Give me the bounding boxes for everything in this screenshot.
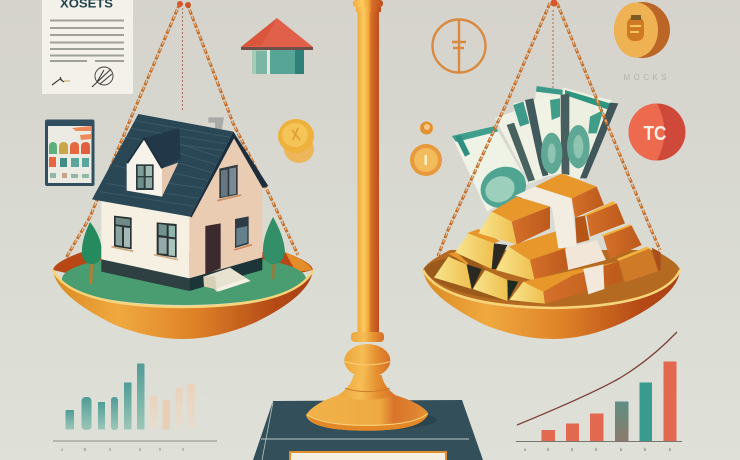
axis labels right: b xyxy=(595,447,598,452)
left scale pan xyxy=(53,252,313,305)
axis labels left: 5 xyxy=(109,447,112,452)
gold bar: bottom center xyxy=(473,270,518,301)
left chains xyxy=(66,1,298,258)
gold bar: rear top xyxy=(535,173,604,218)
bill left-middle xyxy=(495,102,543,183)
bill far right xyxy=(561,87,618,178)
roof xyxy=(92,114,233,217)
tree left xyxy=(82,222,102,284)
icon: top right gold coin xyxy=(614,2,670,58)
icon: red coin xyxy=(628,104,686,160)
upper collar xyxy=(351,332,384,342)
pole cap xyxy=(353,0,383,12)
axis right xyxy=(516,440,682,442)
bill middle xyxy=(513,95,562,178)
pedestal xyxy=(253,400,483,460)
bulb xyxy=(344,344,390,377)
bill front xyxy=(452,126,533,215)
right chains xyxy=(438,0,660,256)
document signature xyxy=(52,67,113,87)
gold bar: top front xyxy=(478,197,550,244)
left wall xyxy=(101,200,189,278)
axis labels left: 0 xyxy=(182,447,185,452)
icon: red coin: TC xyxy=(644,123,666,145)
lawn xyxy=(62,253,306,305)
gold bar: right upper xyxy=(575,201,625,243)
chimney xyxy=(208,117,224,131)
left pan bowl xyxy=(53,270,313,339)
dormer xyxy=(127,139,162,197)
axis labels right xyxy=(524,447,672,452)
bar chart left xyxy=(53,364,217,452)
axis labels right: b xyxy=(669,447,672,452)
axis labels left: 0 xyxy=(159,447,162,452)
icon: medium coin xyxy=(410,144,442,176)
axis labels left: o xyxy=(61,447,64,452)
icon: small house xyxy=(241,18,313,74)
bar chart right xyxy=(516,332,682,452)
scale central column xyxy=(353,0,383,336)
scale base xyxy=(306,332,437,431)
gold bar: bottom left xyxy=(434,252,482,289)
house xyxy=(92,114,268,292)
document lines xyxy=(50,20,124,61)
icon: tablet with charts xyxy=(45,120,94,186)
lower window left xyxy=(111,216,133,251)
right wall xyxy=(189,135,262,278)
foundation xyxy=(101,259,189,291)
money bills xyxy=(452,86,618,215)
axis labels right: o xyxy=(524,447,527,452)
axis labels left: B xyxy=(83,447,87,452)
axis labels right: b xyxy=(644,447,647,452)
right scale pan interior xyxy=(423,250,680,308)
axis labels right: 5 xyxy=(571,447,574,452)
white strap upper xyxy=(515,187,577,248)
pole xyxy=(358,8,379,336)
upper right window xyxy=(217,165,241,201)
plaque xyxy=(290,452,446,460)
dormer window xyxy=(136,164,154,190)
axis labels right: b xyxy=(547,447,550,452)
collar ring line xyxy=(345,388,390,392)
neck and lower collar xyxy=(338,375,395,400)
axis labels left xyxy=(61,447,185,452)
white strap middle xyxy=(565,240,606,270)
right pan bowl xyxy=(423,270,680,339)
axis labels left: 5 xyxy=(139,447,142,452)
steps xyxy=(203,268,251,292)
gold bar: right middle xyxy=(602,224,642,259)
icon: outlined currency ring xyxy=(432,20,486,72)
icon: small coin xyxy=(420,122,433,134)
gold bar: right lower xyxy=(617,247,661,282)
axis left xyxy=(53,440,217,442)
gold bars xyxy=(434,173,661,304)
tree right xyxy=(263,217,285,279)
roof gable edge xyxy=(190,132,268,217)
lower window middle xyxy=(154,222,178,260)
gold bar: middle left xyxy=(455,229,507,269)
axis labels right: b xyxy=(620,447,623,452)
document: assets sheet xyxy=(42,0,133,94)
trend line xyxy=(517,332,677,425)
gold bar: bottom front xyxy=(509,262,622,304)
label: stocks caption: MOCKS xyxy=(624,73,666,82)
door xyxy=(205,223,221,275)
lower window right xyxy=(234,216,252,250)
base shadow xyxy=(310,410,437,430)
icon: gold coin left xyxy=(278,119,314,163)
rear bill xyxy=(535,86,612,180)
white strap lower xyxy=(583,264,604,294)
foot xyxy=(306,395,428,431)
gold bar: middle front xyxy=(496,231,568,281)
